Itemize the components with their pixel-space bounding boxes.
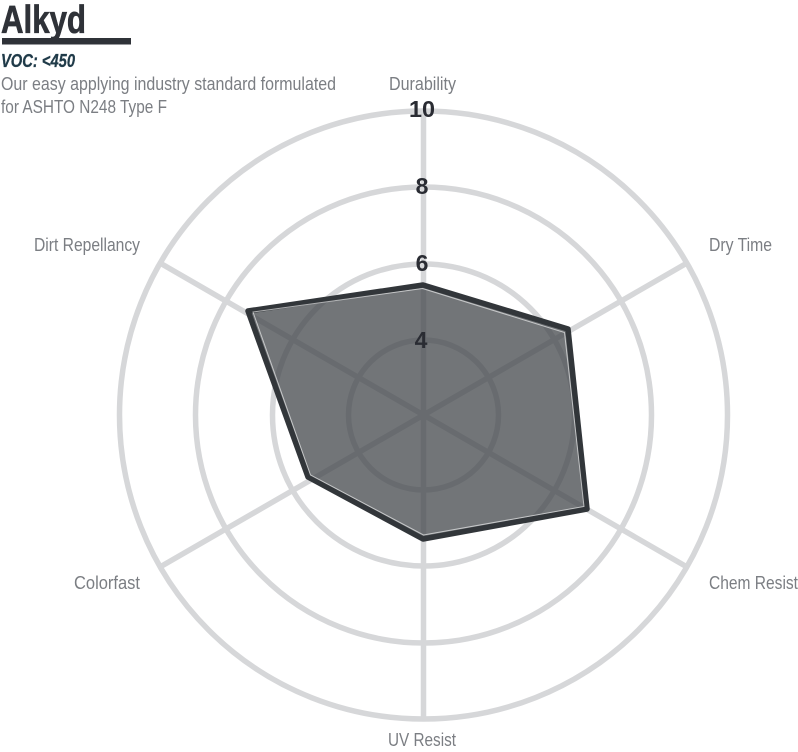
scale labels: 8	[416, 173, 429, 199]
data polygon: Alkyd scores	[248, 285, 587, 539]
scale labels: 10	[409, 96, 435, 122]
scale labels: 4	[415, 327, 428, 353]
scale labels: 6	[416, 250, 428, 276]
title underline	[2, 38, 131, 44]
polygon inner highlight	[253, 288, 584, 535]
axis labels: Dirt Repellancy	[34, 235, 140, 255]
axis labels: Durability	[389, 74, 456, 94]
scale labels	[409, 96, 435, 353]
VOC rating: VOC: <450	[1, 51, 75, 71]
axis labels: UV Resist	[388, 730, 456, 750]
title: Alkyd	[1, 0, 86, 42]
description	[1, 74, 336, 117]
axis labels: Colorfast	[74, 573, 140, 593]
radar grid	[120, 111, 728, 719]
description: Our easy applying industry standard formulated	[1, 74, 336, 94]
description: for ASHTO N248 Type F	[1, 97, 167, 117]
axis labels: Dry Time	[709, 235, 772, 255]
